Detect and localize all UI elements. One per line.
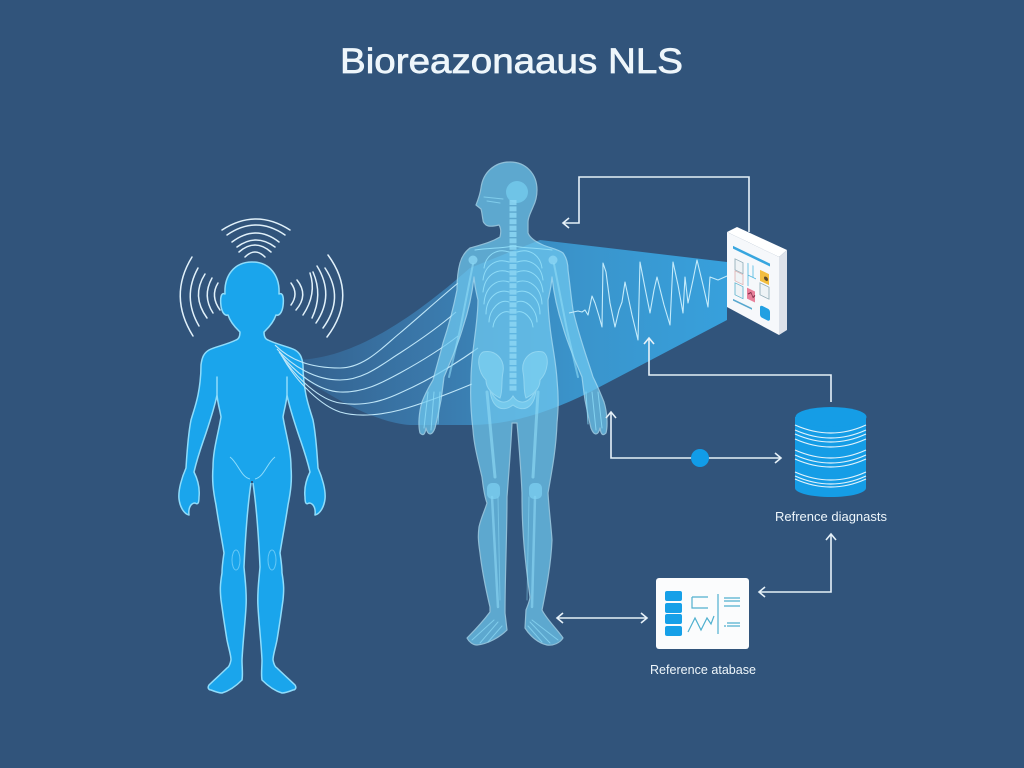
left figure: blue human silhouette	[179, 262, 325, 693]
database cylinder icon	[795, 407, 866, 497]
node dot	[691, 449, 709, 467]
report card icon	[656, 578, 749, 649]
arrow: report card to database	[759, 534, 836, 597]
signal arcs right of head	[291, 255, 343, 337]
signal beam connecting the figures to the device	[298, 240, 727, 425]
arrow: right figure to report card	[557, 613, 647, 623]
signal arcs above head	[222, 219, 290, 257]
signal arcs left of head	[180, 257, 220, 336]
arrow: figure to database with node	[606, 412, 781, 467]
right figure: translucent human with skeleton	[419, 162, 607, 645]
device screen content	[733, 246, 770, 322]
label: reference database: Reference atabase	[650, 663, 756, 677]
translucent body	[419, 162, 607, 645]
waveform signal	[569, 260, 727, 340]
knee bones	[487, 483, 542, 499]
signal waves from shoulder	[275, 283, 478, 415]
label: reference diagnosis: Refrence diagnasts	[775, 510, 887, 524]
body outline right half	[252, 262, 325, 693]
arrow: device back to right figure	[563, 177, 749, 232]
pelvis bones	[479, 352, 547, 409]
device: isometric tablet	[727, 227, 787, 335]
title: Bioreazonaaus NLS	[340, 42, 683, 81]
skeleton	[424, 181, 602, 643]
arrow: database to device	[644, 338, 831, 402]
body outline left half	[179, 262, 252, 693]
